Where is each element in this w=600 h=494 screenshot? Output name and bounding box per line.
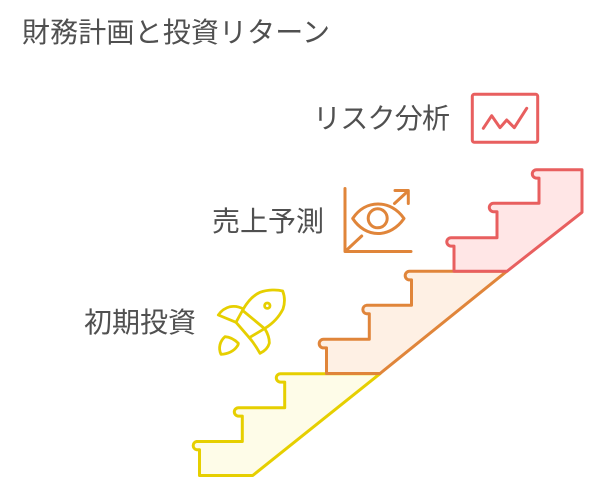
stair step: risk analysis (red) bbox=[447, 170, 582, 271]
stair step: sales forecast (orange) bbox=[319, 271, 507, 374]
stair step: initial investment (yellow) bbox=[193, 374, 380, 476]
title: 財務計画と投資リターン bbox=[22, 17, 330, 48]
label: risk analysis: リスク分析 bbox=[313, 103, 450, 134]
label: sales forecast: 売上予測 bbox=[212, 206, 324, 237]
icon: chart monitor bbox=[472, 94, 538, 142]
icon: rocket bbox=[218, 290, 284, 354]
label: initial investment: 初期投資 bbox=[84, 307, 196, 338]
icon: eye on chart with arrow bbox=[345, 188, 411, 252]
